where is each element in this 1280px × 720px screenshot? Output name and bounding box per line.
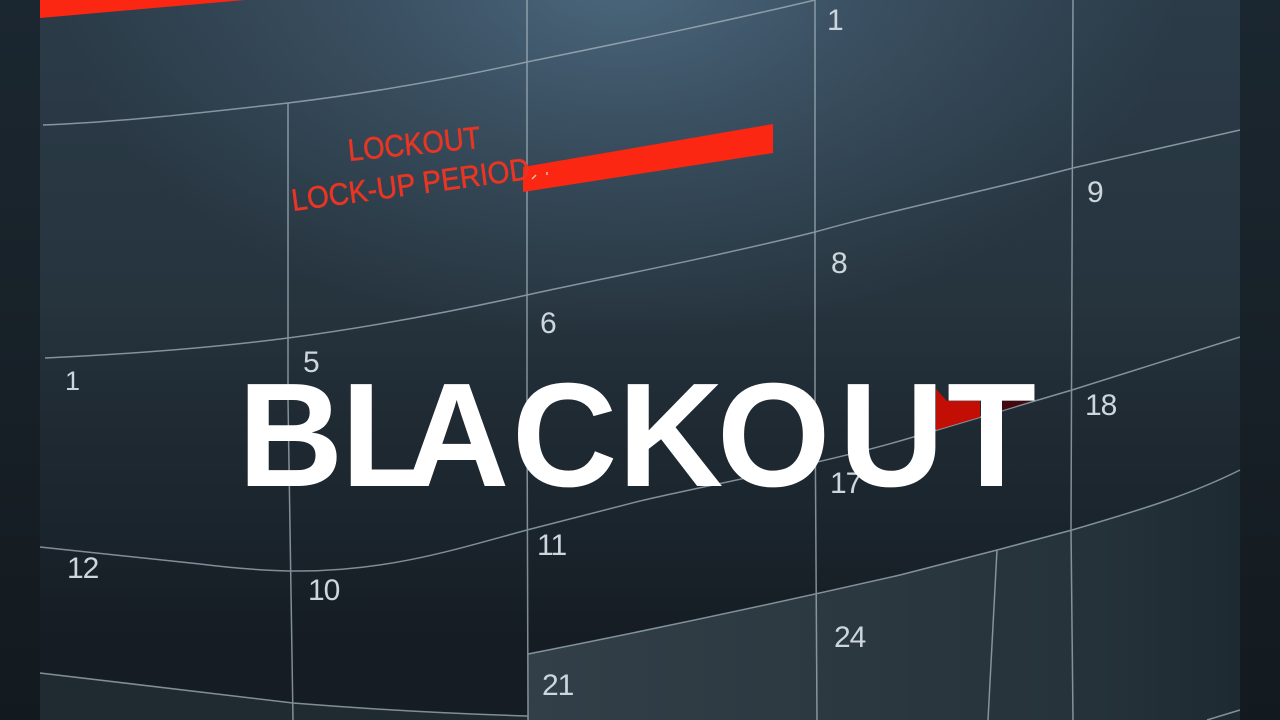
- title: BLACKOUT: [238, 353, 1036, 518]
- red marker right part: [1000, 401, 1032, 411]
- left margin: [0, 0, 40, 720]
- date 1: 1: [827, 4, 843, 37]
- date 5: 5: [303, 346, 319, 379]
- red lockout bar: [523, 124, 773, 192]
- date 12: 12: [67, 552, 99, 585]
- date 9: 9: [1087, 176, 1103, 209]
- top glow: [0, 0, 1280, 420]
- label: lockout: LOCKOUT: [346, 120, 482, 168]
- date 18: 18: [1085, 389, 1117, 422]
- calendar dates: [65, 4, 1117, 702]
- red marker left part: [936, 389, 980, 430]
- bottom calendar row: [528, 470, 1240, 720]
- date 11: 11: [537, 529, 566, 562]
- date 24: 24: [834, 621, 866, 654]
- date 10: 10: [308, 574, 340, 607]
- date small mark: 1: [65, 366, 79, 396]
- date 8: 8: [831, 247, 847, 280]
- right margin: [1240, 0, 1280, 720]
- lockout labels: [289, 120, 532, 218]
- date 21: 21: [542, 669, 574, 702]
- bottom left calendar row: [40, 673, 528, 720]
- specks on red bar: [532, 172, 547, 179]
- top red bar: [40, 0, 245, 18]
- date 17: 17: [830, 467, 862, 500]
- label: lock-up period: LOCK-UP PERIOD: [289, 151, 532, 218]
- date 6: 6: [540, 307, 556, 340]
- red marker behind title: [936, 389, 1032, 430]
